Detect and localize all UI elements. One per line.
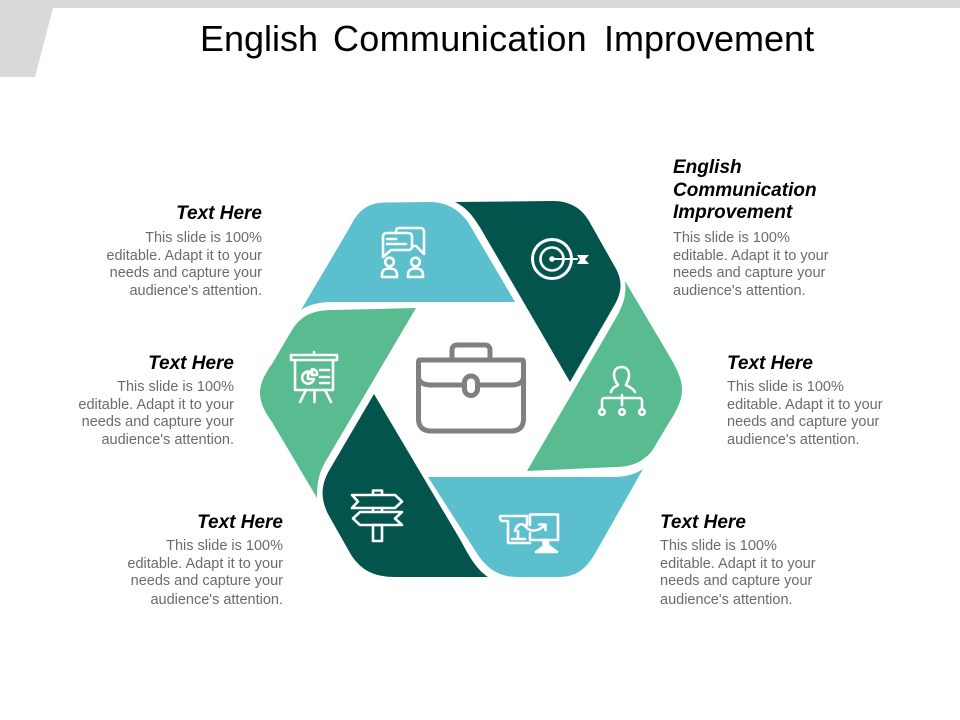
text block: bottom left: This slide is 100% [166, 538, 283, 554]
text block: bottom right [660, 512, 816, 608]
title: Communication [333, 18, 587, 59]
segment: top blue [301, 202, 515, 310]
text block: middle left: Text Here [148, 353, 234, 374]
segment: right green [527, 281, 682, 471]
text block: top right: audience's attention. [673, 283, 806, 299]
text block: top right: This slide is 100% [673, 230, 790, 246]
icon: briefcase [418, 345, 524, 431]
icon: scroll and monitor [500, 514, 558, 552]
text block: middle left [78, 353, 234, 448]
header decoration [0, 0, 960, 77]
text block: bottom right: This slide is 100% [660, 538, 777, 554]
title: Improvement [604, 18, 814, 59]
text block: bottom right: audience's attention. [660, 592, 793, 608]
title: English [200, 18, 318, 59]
text block: middle left: needs and capture your [82, 414, 234, 430]
text block: middle right: Text Here [727, 353, 813, 374]
text block: bottom left: needs and capture your [131, 573, 283, 589]
text block: top left: Text Here [176, 203, 262, 224]
text block: middle left: This slide is 100% [117, 379, 234, 395]
text block: middle right: This slide is 100% [727, 379, 844, 395]
text block: bottom left: audience's attention. [150, 592, 283, 608]
text block: bottom left: editable. Adapt it to your [127, 556, 283, 572]
segment: top dark green [455, 201, 621, 382]
icon: signpost [352, 490, 402, 541]
text block: bottom left [127, 512, 283, 608]
text block: middle right: needs and capture your [727, 414, 880, 430]
text block: top left: audience's attention. [129, 283, 262, 299]
text block: top left: This slide is 100% [145, 230, 262, 246]
text block: middle right: editable. Adapt it to your [727, 397, 883, 413]
text block: middle left: audience's attention. [101, 432, 234, 448]
text block: middle right: audience's attention. [727, 432, 860, 448]
text block: top right: Improvement [673, 202, 793, 223]
segment: bottom blue [428, 469, 643, 577]
text block: top right: Communication [673, 180, 817, 201]
segment: bottom dark green [323, 394, 488, 577]
text block: top left [106, 203, 262, 299]
icon: org person [599, 367, 645, 415]
text block: top left: editable. Adapt it to your [106, 248, 262, 264]
text block: bottom right: Text Here [660, 512, 746, 533]
text block: bottom right: needs and capture your [660, 573, 813, 589]
segment: left green [260, 308, 416, 498]
icon: people chat [382, 228, 424, 277]
text block: bottom right: editable. Adapt it to your [660, 556, 816, 572]
text block: top right: editable. Adapt it to your [673, 248, 829, 264]
icon: target with arrow [532, 240, 589, 278]
text block: top right [673, 157, 829, 299]
text block: top left: needs and capture your [110, 265, 262, 281]
text block: bottom left: Text Here [197, 512, 283, 533]
text block: middle right [727, 353, 883, 448]
text block: top right: needs and capture your [673, 265, 826, 281]
icon: presentation board [291, 352, 337, 402]
text block: middle left: editable. Adapt it to your [78, 397, 234, 413]
text block: top right: English [673, 157, 742, 178]
